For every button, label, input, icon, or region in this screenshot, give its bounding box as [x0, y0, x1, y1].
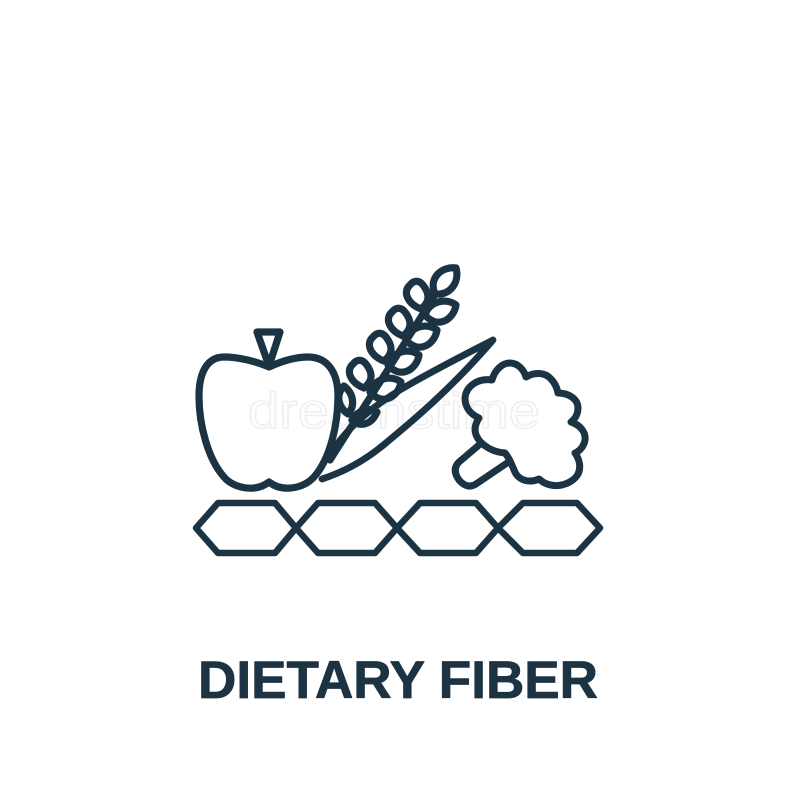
watermark: dreamstime	[248, 383, 540, 439]
icon: broccoli	[455, 363, 585, 486]
icon: broccoli stem	[455, 445, 510, 486]
icon: wheat	[330, 268, 457, 460]
icon: apple stem	[257, 332, 280, 366]
icon: apple	[199, 332, 338, 488]
title: DIETARY FIBER	[198, 651, 598, 710]
icon: fiber chain	[196, 503, 600, 553]
icon: leaf	[322, 340, 493, 479]
